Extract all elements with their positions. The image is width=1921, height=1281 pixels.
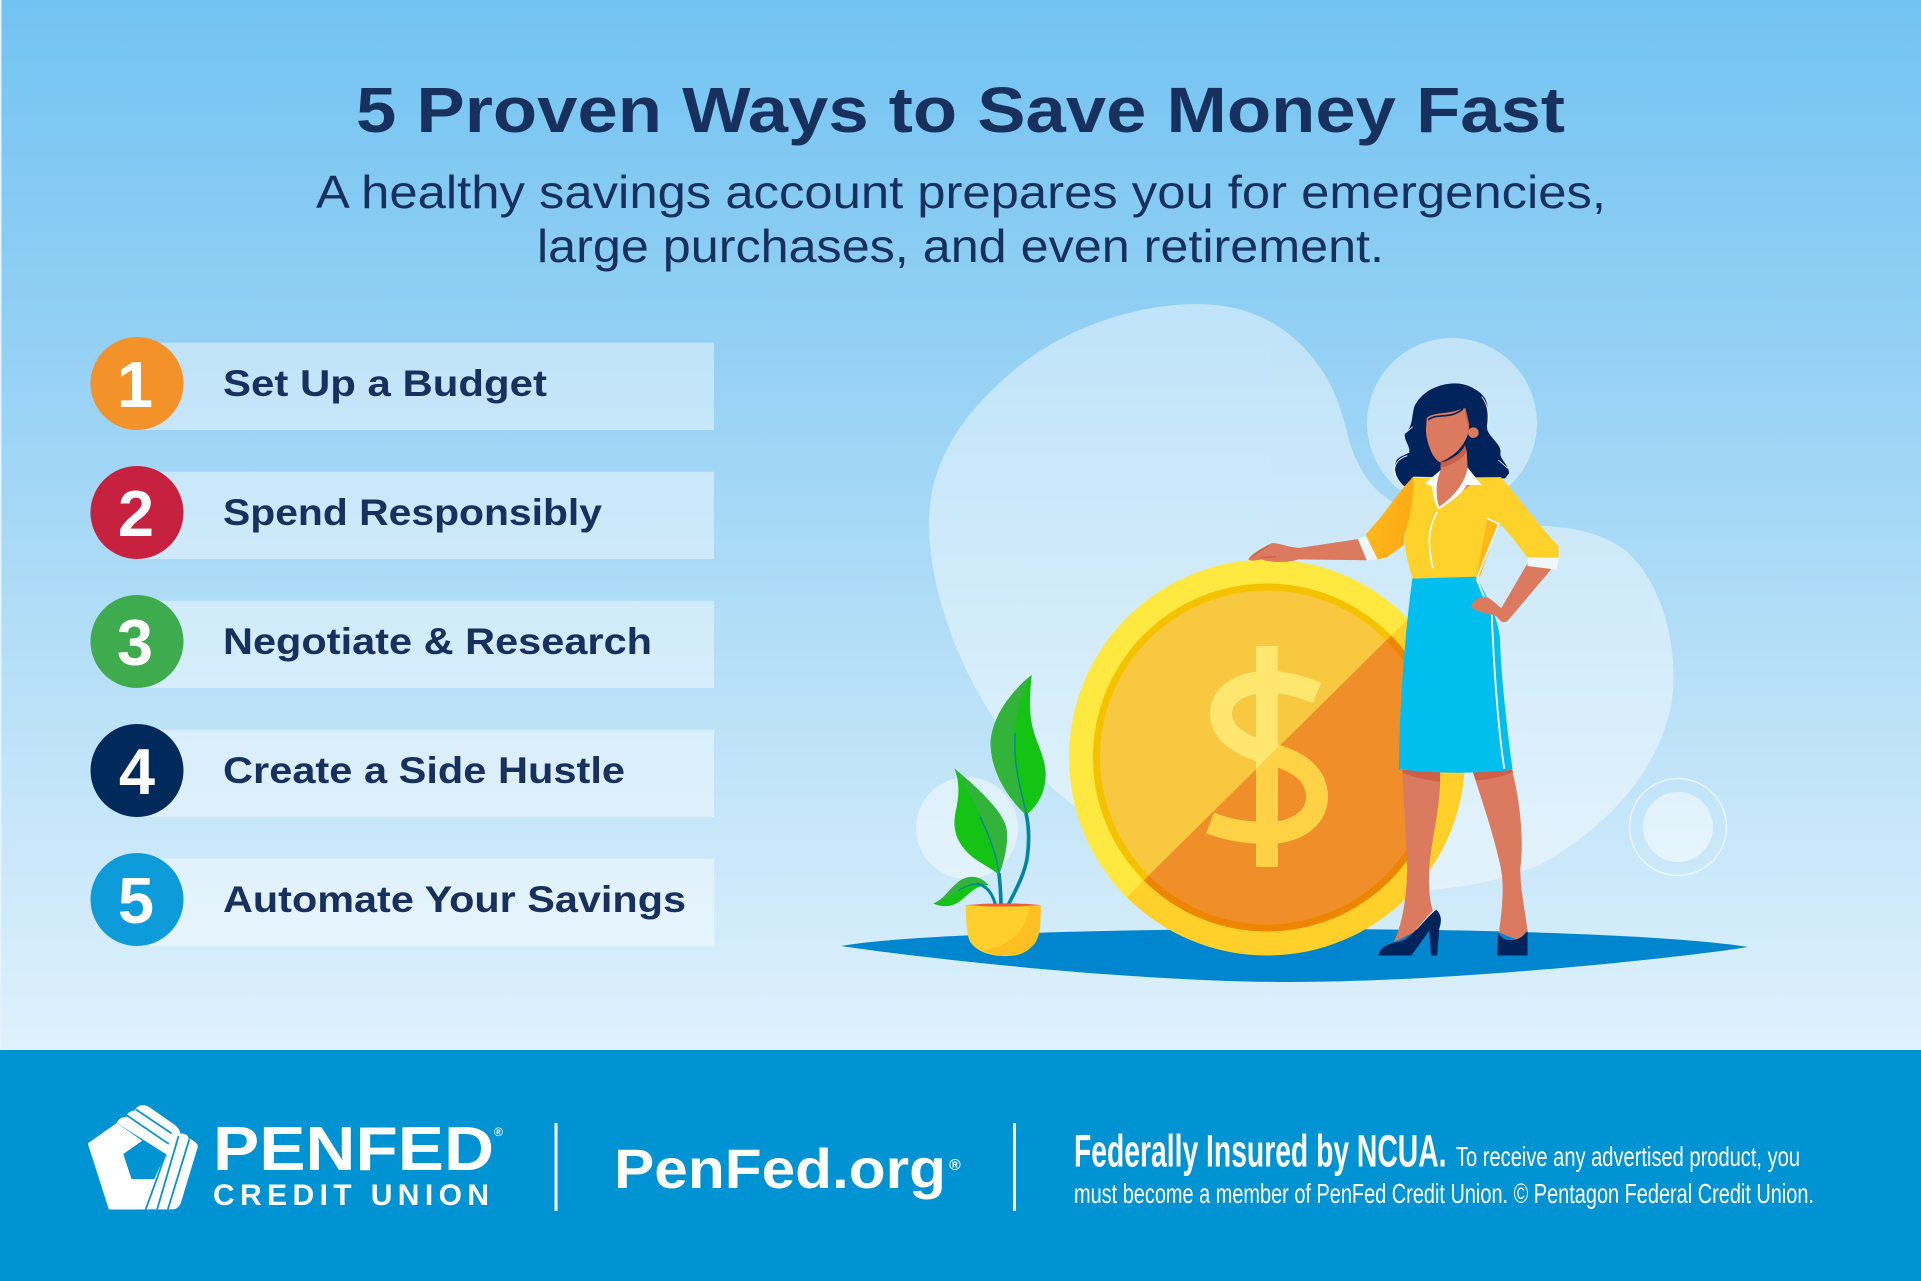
shoes (1379, 910, 1441, 956)
title: 5 Proven Ways to Save Money Fast (356, 74, 1565, 146)
illustration: woman with coin and plant (841, 304, 1748, 982)
icon: pentagon logo (88, 1105, 198, 1209)
item 2: 2 (118, 477, 154, 550)
background blob (929, 304, 1673, 892)
item 2 (90, 466, 714, 559)
item 2: Spend Responsibly (223, 492, 602, 533)
item 3 (90, 595, 714, 688)
skirt (1399, 576, 1512, 773)
item 3: 3 (117, 606, 153, 679)
icon: potted plant (933, 675, 1046, 956)
head, neck and collar (1425, 408, 1482, 509)
subtitle: large purchases, and even retirement. (537, 220, 1384, 272)
subtitle (316, 166, 1606, 272)
hair (1394, 383, 1509, 487)
divider (554, 1123, 558, 1211)
logo: PenFed Credit Union: ® (494, 1125, 503, 1139)
item 4: 4 (119, 735, 155, 808)
item 1: 1 (117, 348, 153, 421)
legs (1394, 770, 1440, 942)
logo: PenFed Credit Union: CREDIT UNION (213, 1179, 489, 1212)
footer band (0, 1050, 1921, 1281)
icon: coin (1069, 560, 1465, 956)
item 3: Negotiate & Research (223, 621, 652, 662)
cuffs (1358, 536, 1377, 560)
logo: PenFed Credit Union: PENFED (213, 1115, 494, 1184)
item 5: Automate Your Savings (223, 879, 686, 920)
item 1: Set Up a Budget (223, 363, 547, 404)
small circle behind plant (916, 777, 1018, 879)
item 4 (90, 724, 714, 817)
disclaimer: Federally Insured by NCUA. (1074, 1126, 1446, 1177)
seams (1429, 512, 1499, 577)
blouse (1404, 477, 1559, 579)
item 1 (90, 337, 714, 430)
decorative rings (1630, 778, 1726, 876)
subtitle: A healthy savings account prepares you for emergencies, (316, 166, 1606, 218)
list of five ways (90, 337, 714, 946)
disclaimer (1074, 1126, 1814, 1209)
body (1248, 477, 1559, 956)
logo: PenFed Credit Union (88, 1105, 503, 1212)
ground shadow (841, 929, 1748, 982)
icon: woman (1248, 383, 1559, 956)
arm on coin (1248, 539, 1367, 562)
divider (1013, 1123, 1016, 1211)
item 5: 5 (118, 864, 154, 937)
item 4: Create a Side Hustle (223, 750, 625, 791)
website: ® (949, 1157, 961, 1174)
item 5 (90, 853, 714, 946)
arm on hip (1471, 563, 1551, 622)
website: PenFed.org (614, 1137, 946, 1200)
